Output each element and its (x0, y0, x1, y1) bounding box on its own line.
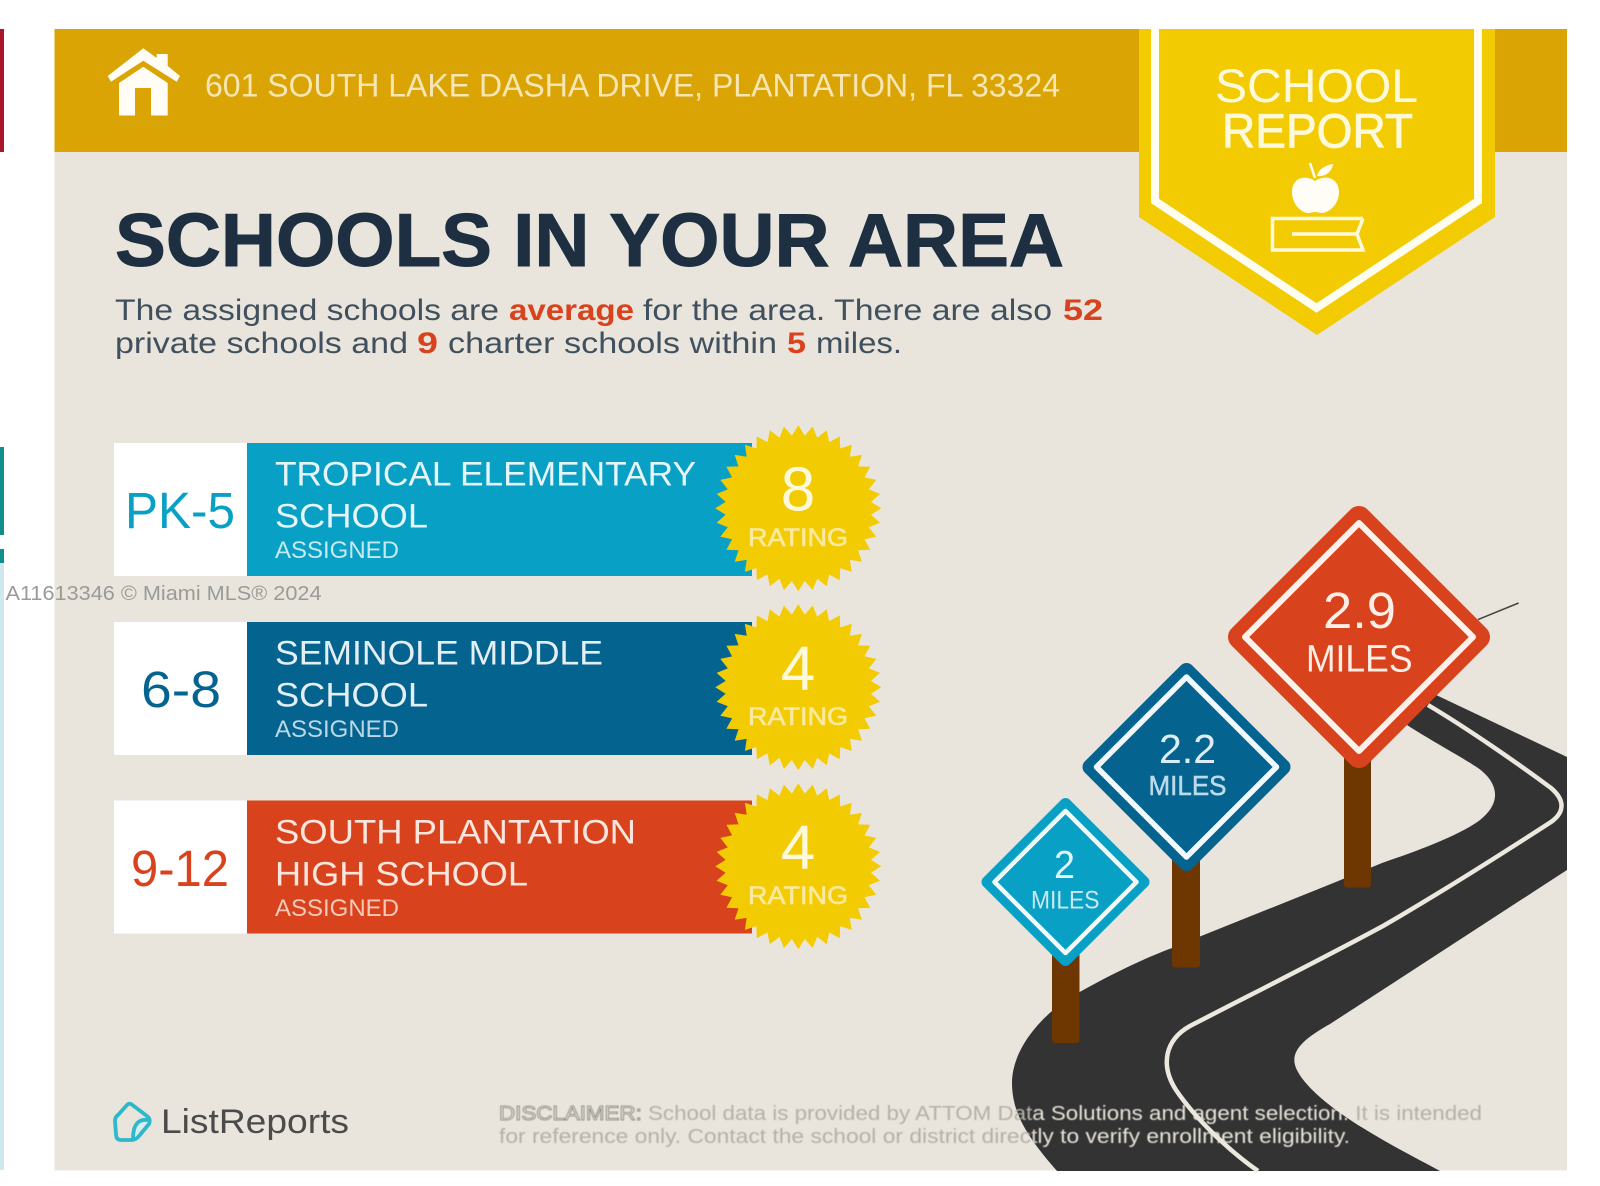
grade: PK-5: PK-5 (125, 482, 235, 539)
illustration: winding road (1012, 603, 1567, 1171)
school name: ASSIGNED (275, 537, 399, 564)
intro text (115, 294, 1103, 360)
intro text: 9 (417, 327, 438, 360)
school name: ASSIGNED (275, 895, 399, 922)
rating seal: 4: RATING (748, 882, 848, 910)
road sign: 2.9 miles: 2.9 (1323, 582, 1396, 639)
icon: logo house (115, 1104, 150, 1140)
school name: SOUTH PLANTATION (275, 814, 636, 852)
school row: Seminole Middle (114, 604, 881, 770)
address: 601 SOUTH LAKE DASHA DRIVE, PLANTATION, FL 33324 (205, 68, 1060, 104)
road sign: 2.2 miles: MILES (1148, 770, 1226, 801)
school name (275, 814, 636, 922)
intro text: miles. (816, 327, 902, 360)
intro text: average (509, 294, 634, 327)
icon: house (108, 48, 180, 115)
school name: SCHOOL (275, 676, 428, 714)
grade: 9-12: 9-12 (131, 840, 229, 897)
rating seal: 4: 4 (781, 814, 815, 882)
school row: Tropical Elementary (114, 425, 881, 591)
title: SCHOOLS IN YOUR AREA (115, 198, 1064, 282)
intro text: private schools and (115, 327, 408, 360)
school name: HIGH SCHOOL (275, 856, 528, 894)
icon: apple on book (1272, 163, 1363, 250)
intro text: 5 (787, 327, 806, 360)
grade: 6-8: 6-8 (141, 661, 221, 718)
intro text: charter schools within (448, 327, 777, 360)
intro text: for the area. There are also (643, 294, 1052, 327)
school name (275, 634, 603, 743)
logo: ListReports: ListReports (161, 1103, 349, 1141)
header band (54, 29, 1567, 152)
rating seal: 8: RATING (748, 524, 848, 552)
badge: school report (1139, 29, 1495, 335)
road sign: 2.9 miles: MILES (1306, 638, 1412, 680)
rating seal: 8: 8 (781, 456, 815, 524)
road sign: 2 miles (988, 804, 1144, 1043)
school name: SEMINOLE MIDDLE (275, 634, 603, 672)
road sign: 2 miles: 2 (1054, 844, 1075, 887)
intro text: The assigned schools are (115, 294, 499, 327)
badge heading (1215, 59, 1418, 158)
disclaimer: DISCLAIMER: School data is provided by ATTOM Data Solutions and agent selection. It is intended (499, 1102, 1482, 1125)
school name: TROPICAL ELEMENTARY (275, 456, 696, 494)
badge heading: SCHOOL (1215, 59, 1418, 112)
rating seal: 4: RATING (748, 703, 848, 731)
road sign: 2.9 miles (1240, 518, 1478, 888)
rating seal: 4: 4 (781, 634, 815, 704)
road sign: 2 miles: MILES (1031, 886, 1100, 914)
rating seal: 8 (715, 425, 881, 591)
rating seal: 4 (715, 783, 881, 949)
school name: ASSIGNED (275, 716, 399, 743)
rating seal: 4 (715, 604, 881, 770)
watermark: A11613346 © Miami MLS® 2024 (6, 583, 322, 605)
school name: SCHOOL (275, 498, 428, 536)
road sign: 2.2 miles (1090, 671, 1282, 968)
disclaimer: for reference only. Contact the school or district directly to verify enrollment eligibility. (499, 1125, 1350, 1148)
disclaimer (499, 1102, 1482, 1148)
intro text: 52 (1063, 294, 1103, 327)
school name (275, 456, 696, 564)
left edge neighbouring image slivers (0, 29, 4, 1170)
badge heading: REPORT (1222, 106, 1413, 158)
school row: South Plantation High (114, 783, 881, 949)
road sign: 2.2 miles: 2.2 (1159, 726, 1216, 772)
